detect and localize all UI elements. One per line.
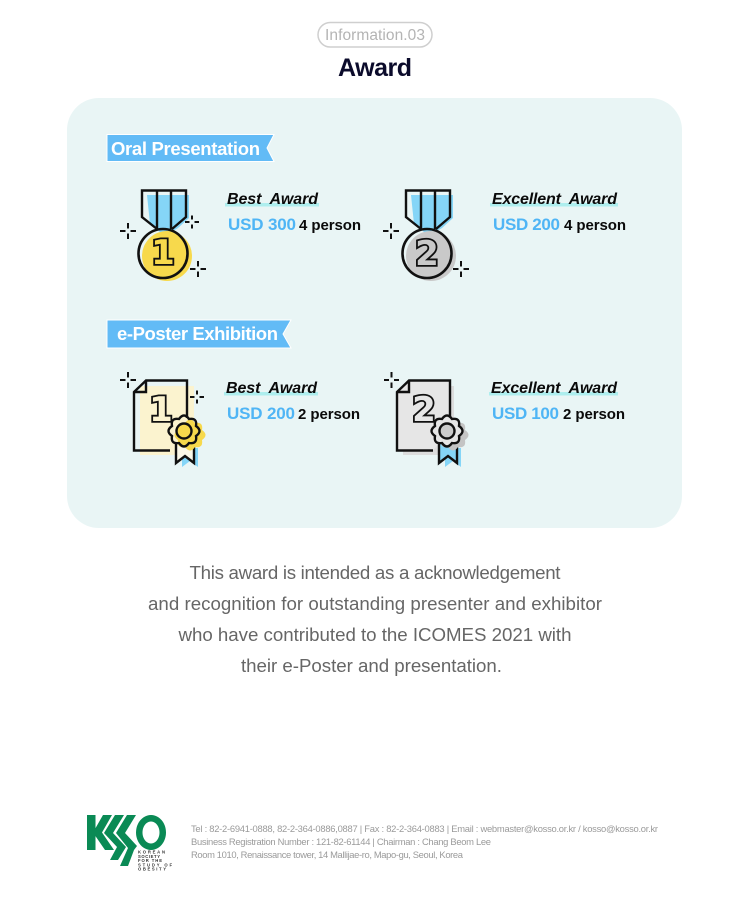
title: Award (338, 54, 412, 82)
footer contact text: Business Registration Number : 121-82-61144 | Chairman : Chang Beom Lee (191, 836, 491, 847)
ribbon heading: oral presentation: Oral Presentation (111, 138, 260, 159)
logo wordmark: OBESITY (138, 866, 166, 872)
logo wordmark: FOR THE (138, 858, 162, 863)
icon: silver certificate: 2 (412, 390, 436, 430)
icon: gold certificate: 1 (149, 390, 173, 430)
award text: oral excellent award: Excellent Award (492, 191, 618, 208)
logo wordmark: SOCIETY (138, 854, 160, 859)
ribbon heading: e-poster exhibition (107, 320, 291, 348)
logo mark (87, 815, 166, 866)
award text: oral best award: USD 300 (228, 215, 296, 234)
logo wordmark: STUDY OF (138, 862, 172, 867)
award text: poster excellent award (489, 380, 625, 423)
icon: gold medal (120, 190, 206, 281)
award text: poster best award: Best Award (226, 380, 318, 397)
award text: poster best award: USD 200 (227, 404, 295, 423)
logo wordmark: KOREAN (138, 850, 165, 854)
logo wordmark (138, 850, 172, 872)
award text: poster excellent award: USD 100 (492, 404, 559, 423)
ribbon heading: oral presentation (107, 134, 274, 162)
icon: gold medal: 1 (151, 233, 175, 273)
award text: oral excellent award (490, 191, 626, 234)
award text: oral best award: 4 person (299, 217, 361, 234)
ribbon heading: e-poster exhibition: e-Poster Exhibition (117, 323, 278, 344)
award text: oral best award: Best Award (227, 191, 319, 208)
description text (148, 562, 602, 676)
icon: silver medal: 2 (415, 234, 439, 274)
description text: who have contributed to the ICOMES 2021 with (178, 624, 572, 645)
description text: and recognition for outstanding presenter and exhibitor (148, 593, 602, 614)
award text: oral excellent award: 4 person (564, 217, 626, 234)
award text: poster excellent award: Excellent Award (491, 380, 618, 397)
award text: poster excellent award: 2 person (563, 406, 625, 423)
section tag pill: Information.03 (325, 27, 425, 44)
description text: This award is intended as a acknowledgement (190, 562, 561, 583)
award text: poster best award (224, 380, 360, 423)
footer contact text (191, 823, 658, 860)
section tag pill (318, 22, 432, 47)
award text: oral excellent award: USD 200 (493, 215, 560, 234)
logo: KSSO (87, 815, 172, 872)
award text: oral best award (225, 191, 361, 234)
icon: silver certificate (384, 372, 468, 467)
footer contact text: Tel : 82-2-6941-0888, 82-2-364-0886,0887 | Fax : 82-2-364-0883 | Email : webmaster@kosso.or.kr / kosso@kosso.or.kr (191, 823, 658, 834)
icon: gold certificate (120, 372, 206, 467)
description text: their e-Poster and presentation. (241, 655, 502, 676)
footer contact text: Room 1010, Renaissance tower, 14 Mallijae-ro, Mapo-gu, Seoul, Korea (191, 849, 464, 860)
icon: silver medal (383, 190, 469, 281)
award text: poster best award: 2 person (298, 406, 360, 423)
panel: awards (67, 98, 682, 528)
